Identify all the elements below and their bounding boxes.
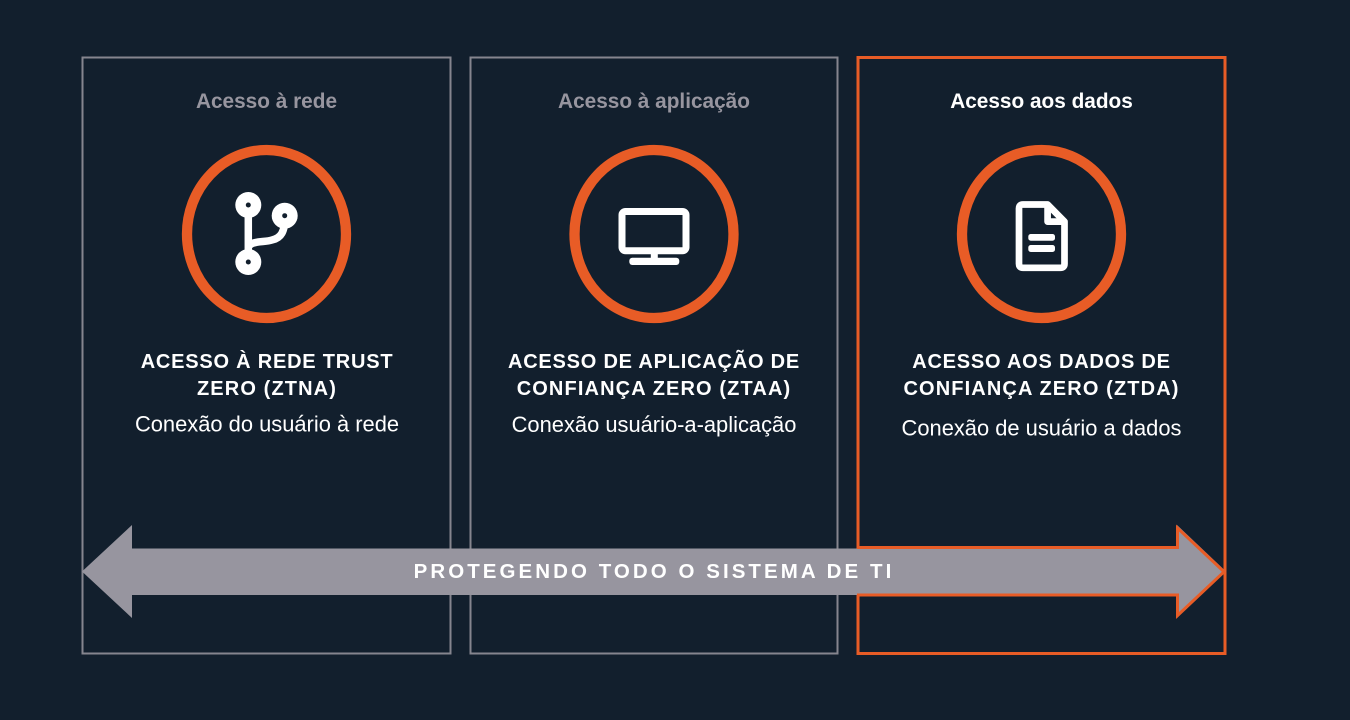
heading: Acesso aos dados: Acesso aos dados <box>950 90 1133 113</box>
heading: Acesso à aplicação: Acesso à aplicação <box>558 90 750 113</box>
arrow: protecting the whole IT system <box>82 525 1226 618</box>
arrow label: PROTEGENDO TODO O SISTEMA DE TI <box>414 560 894 583</box>
panel: network access <box>82 58 450 654</box>
description: ZTNA: Conexão do usuário à rede <box>135 412 399 436</box>
icon: network branch <box>187 150 346 318</box>
title: ZTDA: CONFIANÇA ZERO (ZTDA) <box>903 378 1180 400</box>
heading: Acesso à rede: Acesso à rede <box>196 90 337 113</box>
title: ZTNA: ZERO (ZTNA) <box>197 378 337 400</box>
title: ZTAA: ACESSO DE APLICAÇÃO DE <box>508 350 800 373</box>
title: ZTDA: ACESSO AOS DADOS DE <box>912 351 1171 373</box>
title: ZTAA: CONFIANÇA ZERO (ZTAA) <box>517 378 791 400</box>
icon: document <box>962 150 1121 318</box>
panel: application access <box>470 58 838 654</box>
title: ZTNA: ACESSO À REDE TRUST <box>141 350 393 373</box>
description: ZTAA: Conexão usuário-a-aplicação <box>512 412 796 437</box>
description: ZTDA: Conexão de usuário a dados <box>902 416 1182 440</box>
panel: data access <box>858 58 1225 654</box>
icon: monitor <box>574 150 734 318</box>
